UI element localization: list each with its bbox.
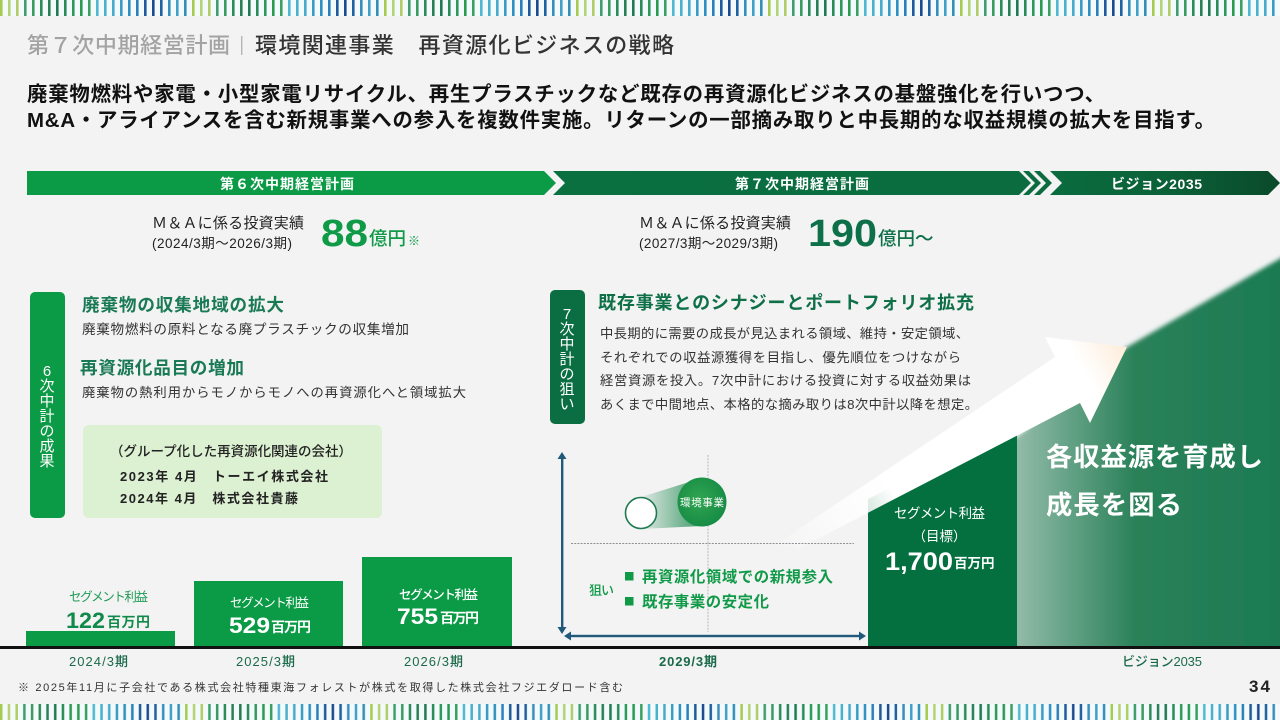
chart quadrant lines [571, 455, 854, 632]
arrow: 6th plan: 第６次中期経営計画 [220, 176, 354, 192]
M&A plan 7th plan: 億円 [878, 228, 915, 249]
bar FY2025: 百万円 [271, 619, 311, 635]
vertical label: 6th plan results: 中 [39, 393, 55, 410]
M&A result 6th plan: 億円 [369, 228, 406, 249]
aim description: あくまで中間地点、本格的な摘み取りは8次中計以降を想定。 [600, 397, 978, 412]
year axis labels: 2025/3期 [236, 654, 295, 669]
vertical label: 7th plan aims [550, 290, 585, 424]
panel: 7th plan aims [550, 290, 978, 424]
year axis labels: 2029/3期 [659, 654, 717, 669]
M&A plan 7th plan: (2027/3期～2029/3期) [639, 236, 778, 251]
bar FY2026: 755 [397, 604, 438, 629]
large arrow [775, 337, 1127, 548]
page number: 34 [1249, 677, 1271, 696]
target profit label: セグメント利益 [894, 506, 986, 521]
target profit label: 1,700 [885, 548, 953, 576]
aim heading: 既存事業とのシナジーとポートフォリオ拡充 [598, 292, 974, 313]
target bar 2029 [868, 425, 1017, 646]
aim bullet list [625, 567, 833, 611]
positioning chart [558, 452, 866, 640]
lead text: 廃棄物燃料や家電・小型家電リサイクル、再生プラスチックなど既存の再資源化ビジネスの基盤強化を行いつつ、 [27, 83, 1105, 106]
result: more items: 再資源化品目の増加 [80, 358, 244, 378]
vertical label: 7th plan aims: 計 [559, 351, 575, 368]
M&A plan 7th plan: Ｍ＆Ａに係る投資実績 [639, 215, 791, 232]
result: more items: 廃棄物の熱利用からモノからモノへの再資源化へと領域拡大 [82, 385, 466, 400]
result: area expansion: 廃棄物燃料の原料となる廃プラスチックの収集増加 [82, 321, 409, 337]
M&A result 6th plan [152, 213, 420, 255]
M&A plan 7th plan: ～ [915, 228, 934, 249]
aim description [600, 326, 978, 412]
aim description: 中長期的に需要の成長が見込まれる領域、維持・安定領域、 [600, 326, 969, 341]
M&A result 6th plan: Ｍ＆Ａに係る投資実績 [152, 215, 304, 232]
result: area expansion: 廃棄物の収集地域の拡大 [82, 295, 284, 315]
bar FY2025 [194, 581, 343, 646]
box: group companies: 2023年 4月 トーエイ株式会社 [120, 469, 328, 484]
M&A result 6th plan: (2024/3期～2026/3期) [152, 236, 292, 251]
bar FY2024: 122 [66, 608, 105, 633]
aim label: 狙い [589, 583, 614, 598]
arrow: vision 2035: ビジョン2035 [1111, 176, 1202, 192]
vertical label: 6th plan results: 6 [43, 363, 51, 380]
growth gradient area [1017, 254, 1280, 646]
arrow: 6th plan [27, 171, 556, 195]
timeline arrows [27, 171, 1280, 195]
vertical label: 7th plan aims: 中 [559, 336, 575, 353]
result: more items [80, 358, 466, 400]
lead text [27, 83, 1215, 132]
bar FY2024: セグメント利益 [69, 590, 148, 604]
arrow: 7th plan [553, 171, 1031, 195]
panel: 6th plan results [30, 292, 466, 518]
bar FY2025: 529 [229, 613, 270, 638]
page title: 第７次中期経営計画 [27, 33, 230, 58]
box: group companies [83, 425, 382, 518]
target profit label [885, 506, 994, 576]
vertical label: 7th plan aims: い [559, 396, 575, 413]
footnote: ※ 2025年11月に子会社である株式会社特種東海フォレストが株式を取得した株式会社フジエダロード含む [18, 680, 623, 694]
aim bullet list: 既存事業の安定化 [642, 592, 770, 611]
target profit label: 百万円 [954, 556, 994, 571]
M&A result 6th plan: 88 [321, 213, 368, 255]
M&A plan 7th plan [639, 213, 934, 255]
arrow: vision 2035 [1050, 171, 1280, 195]
arrow: 7th plan: 第７次中期経営計画 [735, 176, 869, 192]
aim description: それぞれでの収益源獲得を目指し、優先順位をつけながら [600, 349, 961, 365]
vertical label: 7th plan aims: 7 [563, 306, 571, 323]
right panel: growth area [835, 254, 1280, 646]
vertical label: 6th plan results: 計 [39, 408, 55, 425]
target profit label: （目標） [912, 529, 966, 544]
baseline [0, 646, 1280, 649]
growth message: 各収益源を育成し [1046, 442, 1263, 472]
box: group companies: （グループ化した再資源化関連の会社） [110, 443, 352, 459]
year axis labels: ビジョン2035 [1122, 654, 1202, 669]
year axis labels [69, 654, 1202, 669]
chevrons between plans [1023, 171, 1052, 195]
growth message: 成長を図る [1046, 490, 1182, 520]
profit bar chart [26, 557, 512, 646]
box: group companies: 2024年 4月 株式会社貴藤 [120, 491, 298, 506]
bar FY2024: 百万円 [107, 614, 150, 630]
vertical label: 7th plan aims: 狙 [559, 381, 575, 398]
vertical label: 6th plan results [30, 292, 65, 518]
lead text: M&A・アライアンスを含む新規事業への参入を複数件実施。リターンの一部摘み取りと中長期的な収益規模の拡大を目指す。 [27, 109, 1215, 132]
vertical label: 6th plan results: 成 [39, 438, 55, 455]
current position circle [626, 498, 656, 528]
bar FY2026: 百万円 [440, 610, 479, 626]
growth message [1046, 442, 1263, 520]
bottom stripe band [0, 704, 1280, 720]
aim description: 経営資源を投入。7次中計における投資に対する収益効果は [600, 373, 971, 388]
page title [27, 33, 674, 58]
M&A result 6th plan: ※ [408, 234, 420, 248]
chart axes [558, 452, 866, 640]
year axis labels: 2024/3期 [69, 654, 128, 669]
vertical label: 6th plan results: の [39, 423, 55, 440]
M&A plan 7th plan: 190 [808, 213, 877, 255]
year axis labels: 2026/3期 [404, 654, 463, 669]
environment business circle [678, 478, 726, 526]
vertical label: 6th plan results: 次 [39, 378, 55, 395]
vertical label: 7th plan aims: の [559, 366, 575, 383]
vertical label: 6th plan results: 果 [39, 453, 55, 470]
circle label: 環境事業 [680, 496, 724, 509]
aim bullet list: 再資源化領域での新規参入 [642, 567, 833, 586]
bar FY2026: セグメント利益 [399, 587, 478, 602]
result: area expansion [82, 295, 409, 337]
bar FY2026 [362, 557, 512, 646]
bar FY2024 [26, 590, 175, 646]
top stripe band [0, 0, 1280, 16]
bar FY2025: セグメント利益 [230, 596, 309, 610]
business movement trail [641, 478, 702, 529]
page title: 環境関連事業 再資源化ビジネスの戦略 [255, 33, 674, 58]
vertical label: 7th plan aims: 次 [559, 321, 575, 338]
